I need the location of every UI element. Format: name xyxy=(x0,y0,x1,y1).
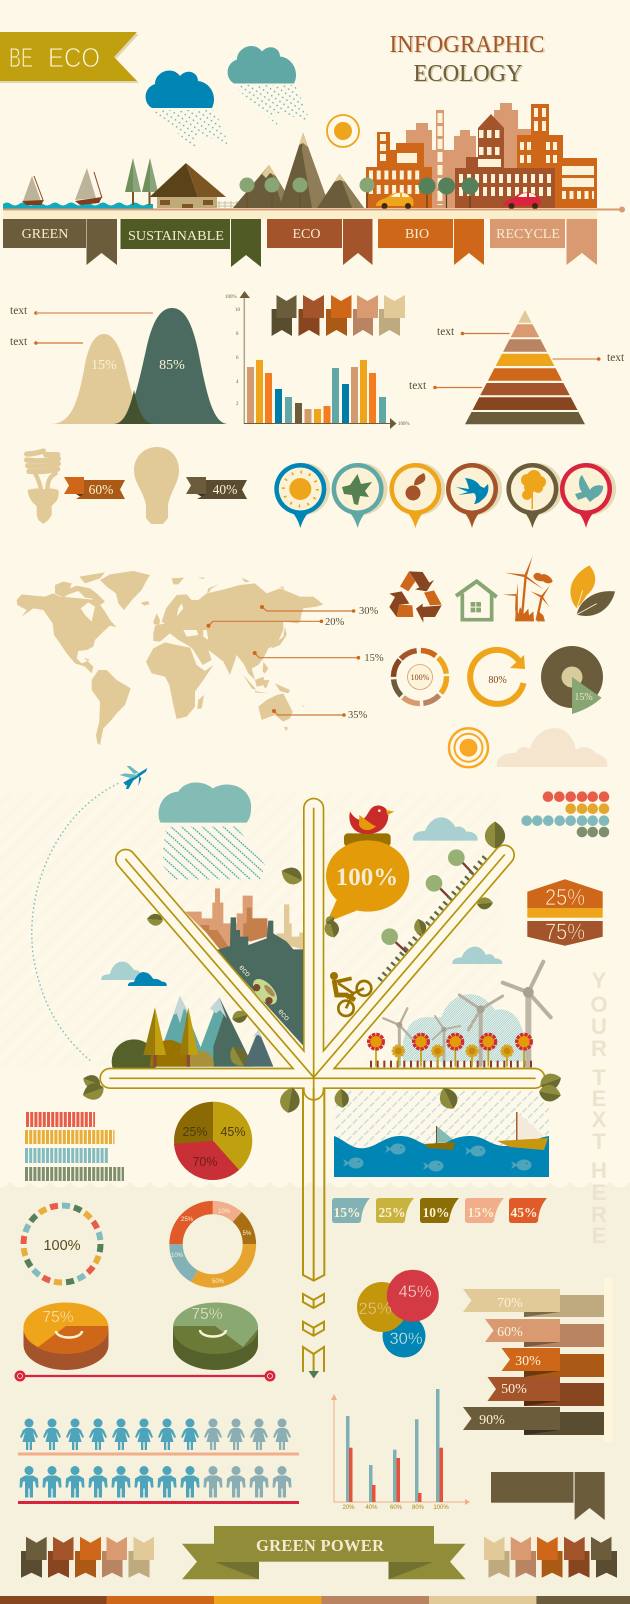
map callout: 20%: 20% xyxy=(325,617,344,628)
icon: teal rain cloud xyxy=(228,46,310,126)
overlapping circles: 30% xyxy=(389,1330,423,1348)
percentage tabs: 10% xyxy=(422,1205,450,1220)
bar chart: 100% xyxy=(225,295,237,300)
world map: eurasia africa oceania xyxy=(146,578,323,731)
map callout: 15%: 15% xyxy=(364,653,384,664)
icon: cyclist xyxy=(330,972,371,1016)
dot rows xyxy=(521,791,609,837)
banner: GREEN POWER xyxy=(182,1526,466,1579)
pyramid labels: text xyxy=(607,352,625,364)
yellow car xyxy=(376,192,414,209)
bell labels: text xyxy=(10,305,28,317)
pie chart: 70% xyxy=(192,1155,218,1169)
donut chart: 15% xyxy=(541,646,603,714)
bird nest speech bubble: 100% xyxy=(336,864,398,891)
badge: 25% / 75%: 75% xyxy=(545,918,585,944)
vertical text: YOUR TEXT HERE: X xyxy=(592,1107,607,1132)
map callout: 15% xyxy=(253,651,384,664)
pyramid labels: text xyxy=(437,326,455,338)
dashed ring: 100% xyxy=(8,1190,116,1298)
eco car: eco xyxy=(276,1007,292,1023)
map callout: 35%: 35% xyxy=(348,710,368,721)
left mountains xyxy=(112,996,273,1084)
banner: BE ECO xyxy=(0,32,139,83)
people row: women xyxy=(18,1418,299,1456)
ribbon stack: 30% xyxy=(515,1354,541,1369)
ribbon: ECO: ECO xyxy=(292,227,320,242)
leaves on tree xyxy=(80,821,564,1114)
map callout: 30%: 30% xyxy=(359,606,378,617)
pie chart xyxy=(174,1102,252,1180)
icon: house xyxy=(456,581,497,620)
tree scene xyxy=(0,766,564,1281)
ribbon: RECYCLE xyxy=(490,219,597,265)
donut chart: 25% xyxy=(181,1217,194,1223)
icon: airplane xyxy=(119,766,147,789)
icon: recycle xyxy=(389,571,442,623)
vertical text: YOUR TEXT HERE: R xyxy=(591,1036,607,1061)
3D pie: orange xyxy=(23,1302,109,1370)
ribbon: GREEN xyxy=(3,219,117,265)
people row: men xyxy=(18,1466,299,1504)
ribbon stack: 90% xyxy=(479,1413,505,1428)
windmills and hatched hills xyxy=(383,962,551,1065)
vertical text: YOUR TEXT HERE: E xyxy=(592,1086,606,1111)
bookmark tabs row xyxy=(272,295,405,336)
donut chart: 10% xyxy=(171,1253,184,1259)
title: Infographic Ecology xyxy=(390,32,546,88)
city in left fork xyxy=(185,888,304,1047)
vertical text: YOUR TEXT HERE: U xyxy=(591,1014,607,1039)
red car xyxy=(503,192,541,209)
bird nest speech bubble xyxy=(326,833,409,922)
bar chart xyxy=(225,291,410,429)
title: Infographic Ecology: INFOGRAPHIC xyxy=(390,32,544,58)
pin: tree xyxy=(506,463,562,528)
icon: red bird xyxy=(349,806,394,834)
bottom colour stripe xyxy=(0,1596,630,1604)
vertical text: YOUR TEXT HERE: H xyxy=(591,1158,607,1183)
pie chart: 45% xyxy=(220,1125,246,1139)
percentage tabs: 15% xyxy=(468,1205,494,1220)
bar chart: 2 xyxy=(236,402,239,407)
title: Infographic Ecology: ECOLOGY xyxy=(415,62,524,88)
vertical text: YOUR TEXT HERE: E xyxy=(592,1223,606,1248)
paired bar chart xyxy=(331,1389,470,1511)
bell labels: text xyxy=(10,336,28,348)
tree lower trunk xyxy=(303,1089,324,1281)
pin: apple xyxy=(389,463,445,528)
hatched sky behind sea xyxy=(334,1090,549,1150)
clouds left xyxy=(101,962,167,986)
ribbon stack: 50% xyxy=(501,1382,527,1397)
paired bar chart: 60% xyxy=(390,1505,403,1511)
paired bar chart: 40% xyxy=(365,1505,378,1511)
bell curve chart: 85% xyxy=(159,358,185,373)
icon: CFL bulb xyxy=(27,451,59,524)
title: Infographic Ecology: ECOLOGY xyxy=(414,61,522,87)
bar chart: 4 xyxy=(236,380,239,385)
3D pie: green: 75% xyxy=(191,1306,223,1323)
ring gauge: 100% xyxy=(383,640,457,714)
icon: leaves xyxy=(570,565,615,616)
pyramid labels: text xyxy=(409,380,427,392)
paired bar chart: 100% xyxy=(433,1505,449,1511)
pin: sun xyxy=(274,463,330,528)
icon: target sun xyxy=(449,728,488,767)
ribbon: GREEN: GREEN xyxy=(22,227,68,242)
round trees xyxy=(240,178,308,208)
title: Infographic Ecology: INFOGRAPHIC xyxy=(391,33,546,59)
eco car xyxy=(237,963,292,1023)
pine trees xyxy=(125,158,158,205)
flight path xyxy=(32,783,118,1062)
flowers row xyxy=(369,1034,535,1067)
bar chart: 10 xyxy=(235,308,240,313)
icon: incandescent bulb xyxy=(134,447,179,524)
arrow gauge: 80% xyxy=(470,650,525,704)
ribbon: SUSTAINABLE xyxy=(120,219,261,267)
bar chart: 100% xyxy=(398,422,410,427)
dashed ring: 100%: 100% xyxy=(43,1238,81,1254)
bar chart: 8 xyxy=(236,332,239,337)
bell curve chart: 15% xyxy=(91,358,117,373)
percentage tabs: 25% xyxy=(378,1205,406,1220)
banner: BE ECO: ECO xyxy=(48,42,100,73)
pyramid labels xyxy=(409,326,625,392)
banner: BE ECO: BE xyxy=(9,42,33,73)
ribbon stack: 60% xyxy=(497,1325,523,1340)
blank ribbon xyxy=(491,1472,605,1520)
map callout: 35% xyxy=(272,709,368,721)
vertical text: YOUR TEXT HERE: T xyxy=(592,1129,606,1154)
donut chart xyxy=(161,1192,265,1296)
map callout: 20% xyxy=(206,617,344,628)
pin: swallow xyxy=(446,463,502,528)
ribbon: 60% xyxy=(64,477,125,499)
big rain cloud xyxy=(159,782,265,879)
badge: 25% / 75% xyxy=(527,879,603,946)
water with boats xyxy=(3,168,153,209)
ribbon: RECYCLE: RECYCLE xyxy=(496,227,560,242)
bookmark tabs bottom right xyxy=(484,1537,617,1578)
icon: sun xyxy=(327,115,359,147)
banner: GREEN POWER: GREEN POWER xyxy=(256,1536,385,1555)
overlapping circles xyxy=(357,1270,439,1358)
bar chart: 6 xyxy=(236,356,239,361)
pin: leaf xyxy=(332,463,388,528)
percentage tabs: 15% xyxy=(334,1205,360,1220)
donut chart: 5% xyxy=(243,1231,252,1237)
grass along branch xyxy=(379,855,487,980)
ribbon: BIO xyxy=(378,219,484,265)
bell labels xyxy=(10,305,153,348)
icon: pale cloud xyxy=(497,728,607,767)
badge: 25% / 75%: 25% xyxy=(545,884,585,910)
percentage tabs: 45% xyxy=(510,1205,538,1220)
paired bar chart: 20% xyxy=(342,1505,355,1511)
background: lower scalloped panel xyxy=(0,1166,630,1604)
ribbon: SUSTAINABLE: SUSTAINABLE xyxy=(128,229,224,244)
icon: blue rain cloud xyxy=(146,71,229,150)
clouds right xyxy=(413,817,502,964)
mountains xyxy=(233,133,364,208)
tree trunk and branches xyxy=(110,808,535,1090)
overlapping circles: 45% xyxy=(398,1283,432,1301)
house xyxy=(150,163,226,208)
vertical text: YOUR TEXT HERE xyxy=(590,968,608,1248)
arrow gauge: 80%: 80% xyxy=(488,675,507,686)
ribbon: 40%: 40% xyxy=(213,482,237,497)
fence xyxy=(217,201,313,208)
red slider line xyxy=(14,1370,276,1382)
ribbon: BIO: BIO xyxy=(405,227,429,242)
donut chart: 15%: 15% xyxy=(574,692,593,703)
icon: windmill plants xyxy=(502,556,553,621)
bookmark tabs bottom left xyxy=(21,1537,154,1578)
vertical text: YOUR TEXT HERE: O xyxy=(590,992,608,1017)
paired bar chart: 80% xyxy=(412,1505,425,1511)
sea with boats and fish xyxy=(334,1112,549,1177)
chevrons under the trunk xyxy=(303,1294,324,1372)
3D pie: orange: 75% xyxy=(42,1309,74,1326)
pyramid xyxy=(465,310,585,424)
striped bars xyxy=(25,1120,124,1174)
donut chart: 50% xyxy=(212,1279,225,1285)
ribbon stack xyxy=(463,1278,613,1442)
ribbon: ECO xyxy=(267,219,372,265)
trees on right branch xyxy=(381,849,473,952)
arrowhead xyxy=(308,1371,319,1378)
ribbon: 40% xyxy=(186,477,247,499)
ring gauge: 100%: 100% xyxy=(411,673,430,682)
city street trees xyxy=(360,178,478,208)
bell curve chart xyxy=(51,308,228,424)
pie chart: 25% xyxy=(182,1125,208,1139)
eco car: eco xyxy=(237,963,253,979)
ribbon: 60%: 60% xyxy=(89,482,113,497)
world map: americas xyxy=(17,571,160,745)
vertical text: YOUR TEXT HERE: Y xyxy=(592,968,607,993)
percentage tabs xyxy=(332,1198,547,1223)
vertical text: YOUR TEXT HERE: E xyxy=(592,1180,606,1205)
ribbon stack: 70% xyxy=(497,1296,523,1311)
3D pie: green xyxy=(173,1302,258,1370)
map callout: 30% xyxy=(260,605,378,617)
city skyline xyxy=(366,103,597,208)
vertical text: YOUR TEXT HERE: T xyxy=(592,1065,606,1090)
overlapping circles: 25% xyxy=(358,1300,392,1318)
vertical text: YOUR TEXT HERE: R xyxy=(591,1202,607,1227)
ground line xyxy=(3,206,625,219)
pin: butterfly xyxy=(560,463,616,528)
donut chart: 10% xyxy=(218,1209,231,1215)
